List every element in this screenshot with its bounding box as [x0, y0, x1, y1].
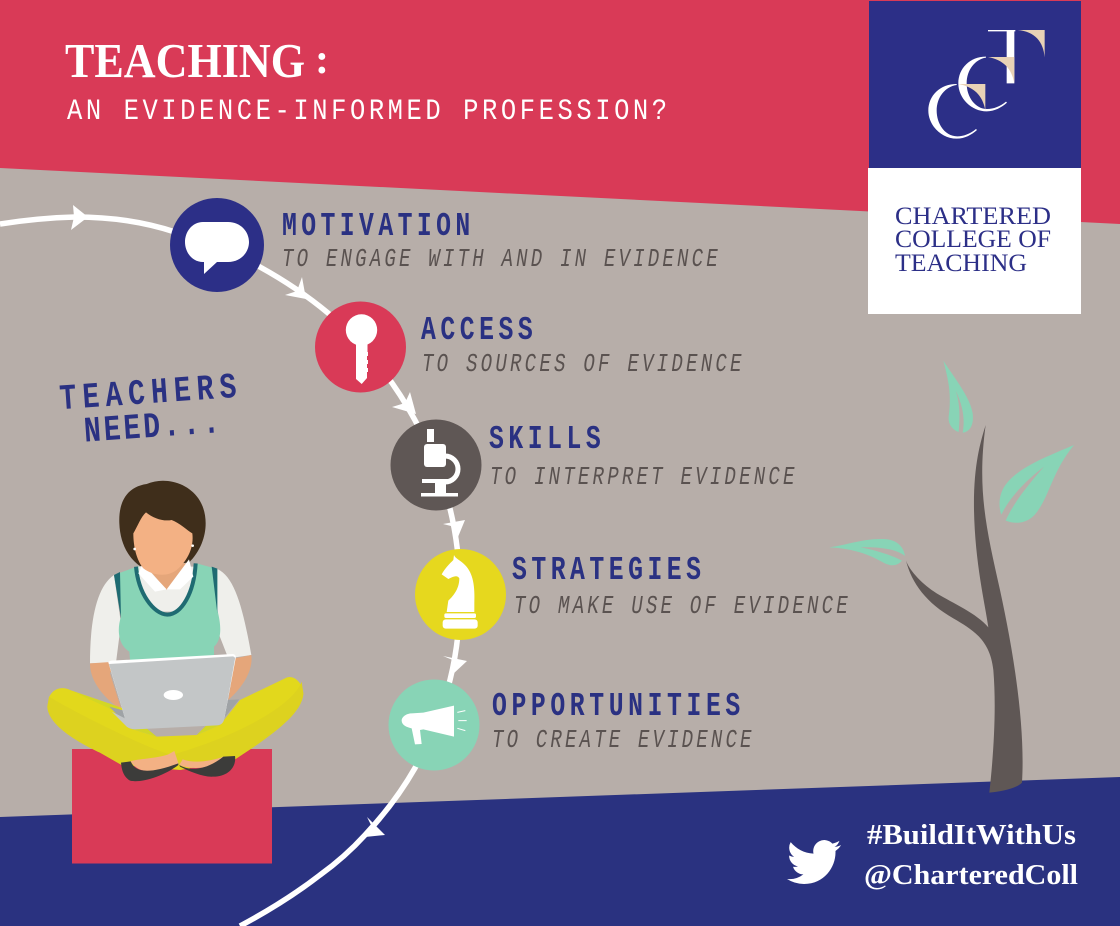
step: opportunities — [388, 680, 752, 770]
neck — [143, 563, 188, 590]
laptop base — [109, 699, 239, 728]
vest — [114, 563, 220, 660]
title: AN EVIDENCE-INFORMED PROFESSION? — [67, 95, 667, 129]
hair — [119, 481, 206, 566]
heading: ACCESS — [421, 312, 533, 349]
description: TO INTERPRET EVIDENCE — [490, 463, 795, 492]
panel: red header band — [0, 0, 1120, 224]
trousers — [47, 677, 303, 770]
social handles — [864, 819, 1078, 891]
title: TEACHING — [65, 33, 305, 88]
step: skills — [390, 420, 795, 510]
description: TO CREATE EVIDENCE — [492, 726, 752, 755]
title: : — [315, 37, 329, 83]
heading: teachers need: NEED... — [83, 402, 221, 453]
icon: key — [315, 302, 406, 392]
social handles: #BuildItWithUs — [867, 819, 1076, 851]
heading: SKILLS — [489, 421, 601, 458]
face — [133, 512, 193, 575]
heading: teachers need — [58, 367, 240, 454]
shoes — [121, 756, 235, 781]
feet — [131, 751, 223, 771]
collar — [138, 559, 193, 592]
panel: navy footer band — [0, 777, 1120, 926]
social handles: @CharteredColl — [864, 859, 1078, 891]
heading: MOTIVATION — [282, 208, 470, 245]
icon: microscope — [390, 420, 482, 510]
heading: teachers need: TEACHERS — [58, 367, 238, 420]
step: access — [315, 302, 742, 392]
arms — [90, 655, 252, 710]
logo mark — [928, 30, 1045, 139]
description: TO MAKE USE OF EVIDENCE — [514, 592, 848, 621]
logo wordmark: TEACHING — [895, 250, 1027, 277]
sleeves — [90, 569, 251, 663]
title — [65, 33, 667, 129]
curved arrow path — [0, 205, 467, 926]
logo: Chartered College of Teaching — [868, 1, 1081, 314]
icon: speech bubble — [170, 198, 264, 292]
heading: STRATEGIES — [512, 552, 701, 589]
heading: OPPORTUNITIES — [492, 688, 740, 725]
laptop lid — [108, 654, 236, 718]
leaves — [829, 361, 1074, 565]
seat: red block — [72, 749, 272, 864]
step: motivation — [170, 198, 718, 292]
description: TO ENGAGE WITH AND IN EVIDENCE — [282, 245, 718, 274]
figure: teacher with laptop — [47, 481, 303, 781]
knee highlights — [73, 692, 220, 737]
description: TO SOURCES OF EVIDENCE — [422, 350, 742, 379]
icon: megaphone — [388, 680, 480, 770]
trunk — [906, 425, 1023, 793]
logo wordmark — [895, 203, 1051, 277]
vest trim — [114, 563, 217, 618]
logo wordmark: CHARTERED — [895, 203, 1051, 230]
trouser shading — [47, 682, 303, 770]
icon: chess knight — [415, 549, 506, 640]
earrings — [133, 544, 194, 550]
tree — [829, 361, 1074, 793]
icon: twitter bird — [787, 840, 841, 884]
step: strategies — [415, 549, 848, 640]
shirt — [137, 567, 197, 612]
logo wordmark: COLLEGE OF — [895, 226, 1051, 253]
